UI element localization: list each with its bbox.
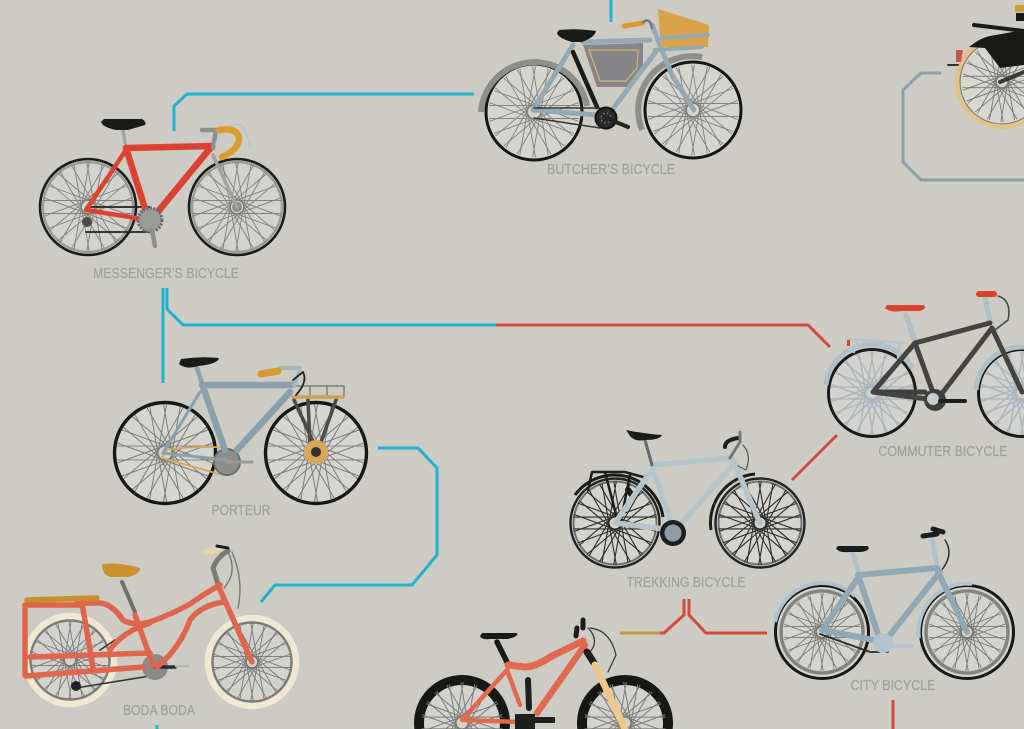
saddle [1015,5,1024,12]
saddle [102,564,140,577]
rear wheel [26,616,114,704]
handlebar tape [219,129,239,157]
connector: trekking to city [689,599,767,633]
bottom bracket [515,714,535,729]
saddle [179,357,219,368]
basket straps [655,35,708,50]
label: TREKKING BICYCLE [626,574,746,591]
brake lever [293,372,304,395]
chain [820,634,888,652]
rack [974,25,1024,31]
handlebar [725,438,738,447]
bicycle: porteur [114,357,366,519]
grip [979,291,994,297]
stem [643,20,652,28]
frame [126,146,212,218]
rear wheel [776,586,868,678]
connector: messenger to porteur [162,288,164,383]
bag outline [589,50,638,81]
rear rack [588,472,643,525]
label: BODA BODA [123,702,195,719]
crank [596,108,628,128]
cables [940,540,949,572]
cable [995,296,1009,330]
grip [923,529,943,536]
frame [25,585,252,676]
cables [215,124,250,146]
chain [86,207,150,232]
stem and bar [213,551,228,584]
down tube [537,645,585,713]
top tube [508,641,583,667]
rear triangle [462,670,520,722]
label: MESSENGER’S BICYCLE [93,265,239,282]
rear wheel [828,350,916,436]
stem [576,620,583,636]
seatpost and stem [906,297,990,342]
connector: porteur to boda boda [261,448,437,602]
frame [822,568,967,642]
rear light [956,50,963,62]
cables [224,552,240,608]
chain guard [874,390,925,394]
black body [969,30,1024,68]
fenders [775,583,972,638]
label: CITY BICYCLE [850,677,936,694]
fenders [575,474,755,530]
bicycle: commuter bicycle [826,294,1024,460]
grip [624,23,643,26]
rear wheel [419,680,505,729]
label: BUTCHER’S BICYCLE [547,161,675,178]
cables [588,628,616,672]
rear rack [849,339,905,358]
derailleur [82,217,92,227]
bag [583,43,643,87]
seatpost and stem [853,538,937,574]
bicycle: city bicycle [775,529,1014,694]
bar end [730,432,740,458]
seatpost [122,582,135,612]
seat tube [573,52,597,107]
stem [202,130,216,148]
saddle [626,430,662,440]
seatpost [197,368,203,386]
basket [658,9,709,47]
connector: top right bicycle [903,73,1024,180]
label: PORTEUR [212,502,271,519]
rear wheel [957,37,1024,127]
bicycle: messenger's bicycle [40,119,285,282]
bicycle: trekking bicycle [570,430,804,591]
crank [924,389,965,411]
chain [76,640,150,688]
connector: trekking to mountain bike, red part [660,599,684,633]
front wheel [978,350,1024,436]
front wheel [208,618,296,706]
fork lower [595,665,625,729]
front wheel [266,402,366,504]
pannier mount [628,490,632,495]
seatpost [645,440,652,465]
rear light [847,340,850,346]
crank [214,449,252,475]
frame [202,385,292,450]
kickstand stub [948,64,958,66]
connector: below city [892,700,894,729]
rear wheel [570,478,660,568]
crank [660,520,686,546]
connector: below boda boda [156,725,158,729]
front wheel [716,478,804,568]
front wheel [189,159,285,255]
front wheel [920,586,1014,678]
frame [533,25,694,115]
rear wheel [486,64,582,160]
hub [304,440,328,464]
seat tube [1000,72,1024,82]
chain [534,108,600,128]
fork and seatpost [123,130,237,207]
saddle shadow [1016,13,1024,21]
crank [873,633,912,653]
fork upper [587,652,594,663]
cables [738,445,748,470]
bicycle: top right, partly cropped [948,5,1024,127]
seatpost [497,642,507,662]
pedal [535,717,555,723]
rack deck [27,598,97,600]
frame [615,458,760,530]
bicycle: mountain bike [419,620,668,729]
connector: top to butcher [610,0,612,22]
connector: messenger to commuter, blue part [167,288,496,325]
connector: messenger to commuter, red part [496,325,830,347]
saddle [557,29,596,42]
saddle [885,305,925,312]
connector: trekking to mountain bike, orange part [620,632,660,634]
grip [206,550,218,552]
connector: messenger to butcher [174,94,474,131]
brake lever [217,546,228,548]
front wheel [582,680,668,729]
derailleur [71,681,81,691]
rear wheel [40,159,136,255]
handlebar [280,368,300,386]
rack rail [297,386,344,397]
grip [261,371,278,374]
bicycle: butcher's bicycle [481,9,741,178]
frame [873,323,1022,400]
shock [528,680,529,708]
saddle [101,119,146,130]
crankset [138,208,162,246]
crank [142,654,188,680]
rear wheel [114,402,216,504]
rack deck [293,395,343,399]
chain guard [162,447,238,474]
front wheel [645,62,741,158]
fenders [826,344,1024,390]
front rack struts [294,400,336,448]
saddle [480,633,517,639]
bicycle: boda boda [25,546,296,719]
saddle [836,546,869,552]
fenders [481,56,702,130]
connector: commuter to trekking [792,435,837,480]
